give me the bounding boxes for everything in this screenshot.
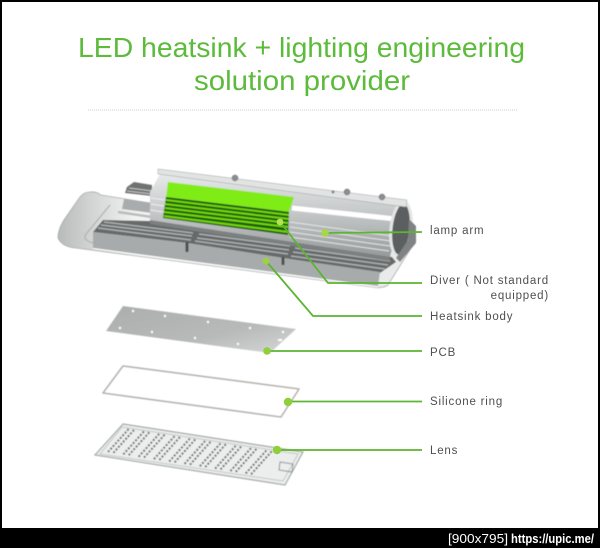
leader lines bbox=[266, 222, 422, 450]
part labels: lamp arm bbox=[430, 225, 484, 237]
part labels: PCB bbox=[430, 347, 456, 359]
top rail bbox=[158, 169, 407, 207]
heatsink front face bbox=[93, 232, 380, 286]
PCB board bbox=[106, 306, 296, 353]
leader dots bbox=[263, 219, 329, 454]
driver highlighted in green bbox=[163, 182, 294, 235]
part labels: Diver ( Not standard bbox=[430, 275, 549, 287]
rear heat fins bbox=[125, 182, 152, 196]
rail bolts bbox=[232, 175, 385, 200]
part labels: Silicone ring bbox=[430, 396, 503, 408]
title: solution provider bbox=[194, 65, 410, 96]
heatsink fins bbox=[93, 220, 396, 273]
title: LED heatsink + lighting engineering bbox=[78, 32, 525, 63]
silicone ring bbox=[103, 366, 299, 417]
lamp assembly illustration bbox=[58, 169, 416, 288]
part labels bbox=[430, 225, 549, 457]
part labels: Lens bbox=[430, 445, 458, 457]
lamp arm tube bbox=[150, 169, 414, 261]
lens array bbox=[95, 424, 303, 485]
image host watermark bbox=[448, 532, 594, 546]
title bbox=[78, 32, 525, 96]
base plate bbox=[58, 192, 416, 288]
tube end opening bbox=[388, 201, 414, 257]
part labels: Heatsink body bbox=[430, 311, 513, 323]
right fixture detail bbox=[396, 219, 416, 262]
part labels: equipped) bbox=[491, 290, 549, 302]
image host watermark: [900x795] bbox=[448, 532, 508, 546]
